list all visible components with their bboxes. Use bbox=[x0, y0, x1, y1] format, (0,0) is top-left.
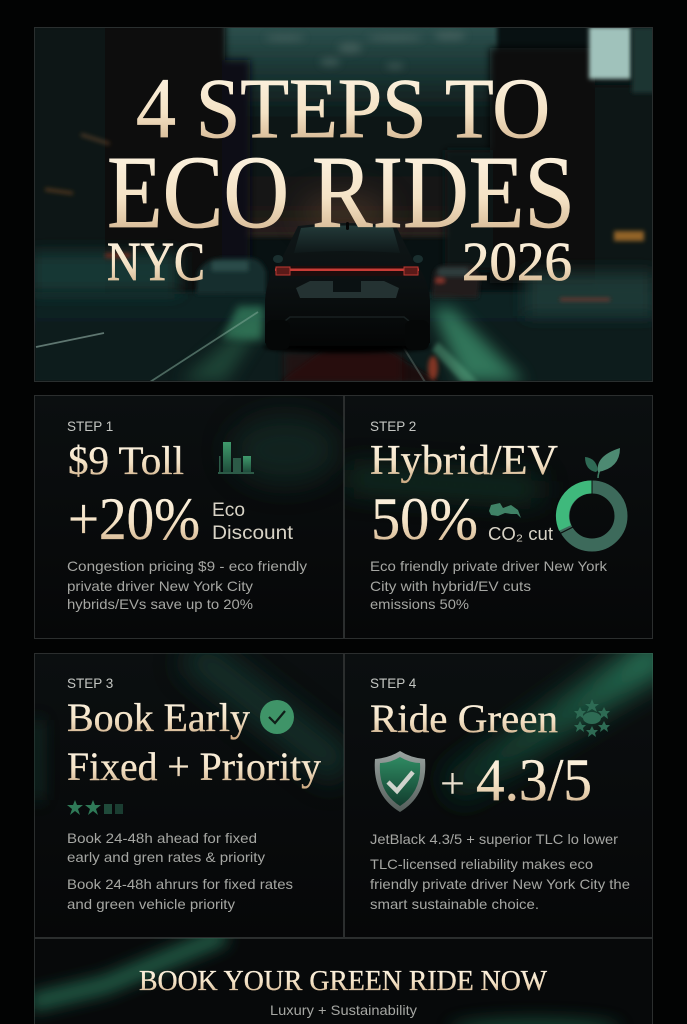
step 4 label: STEP 4 bbox=[370, 676, 417, 691]
step 2 description: Eco friendly private driver New York bbox=[370, 558, 608, 574]
step 4 description: JetBlack 4.3/5 + superior TLC lo lower bbox=[370, 831, 618, 847]
icon: shield bbox=[375, 751, 425, 812]
stat label: Eco Discount: Discount bbox=[212, 523, 294, 544]
step 3 label: STEP 3 bbox=[67, 676, 113, 691]
step 1 description: hybrids/EVs save up to 20% bbox=[67, 596, 253, 612]
step 3 description: Book 24-48h ahead for fixed bbox=[67, 830, 257, 846]
panel: step 1 bbox=[34, 396, 344, 638]
icon: rating stars bbox=[67, 800, 123, 815]
hero title: NYC bbox=[107, 231, 205, 292]
panel: step 3 bbox=[34, 650, 344, 938]
stat label: Eco Discount: Eco bbox=[212, 500, 245, 521]
step 4 description: friendly private driver New York City the bbox=[370, 876, 630, 892]
icon: small car bbox=[489, 503, 521, 518]
icon: check badge bbox=[260, 700, 294, 734]
heading: Fixed + Priority: Fixed + Priority bbox=[67, 744, 321, 789]
stat: +20%: +20% bbox=[68, 486, 200, 552]
panel: call to action bbox=[30, 935, 652, 1024]
step 1 description: Congestion pricing $9 - eco friendly bbox=[67, 558, 307, 574]
step 1 description: private driver New York City bbox=[67, 578, 253, 594]
step 2 description: City with hybrid/EV cuts bbox=[370, 578, 531, 594]
heading: $9 Toll: $9 Toll bbox=[68, 438, 184, 483]
step 2 label: STEP 2 bbox=[370, 419, 416, 434]
icon: bar chart bbox=[218, 442, 254, 474]
hero title: 2026 bbox=[462, 231, 572, 292]
stat: 4.3/5 rating: + bbox=[440, 759, 465, 808]
hero background: city street at dusk bbox=[20, 20, 665, 382]
stat: 50%: 50% bbox=[371, 486, 478, 552]
panel: step 2 bbox=[344, 396, 652, 638]
stat label: CO2 cut: CO₂ cut bbox=[488, 524, 553, 544]
stat label: Eco Discount bbox=[212, 500, 294, 544]
road glow and lane markings bbox=[36, 306, 525, 382]
hero title bbox=[107, 60, 575, 292]
CTA tagline: Luxury + Sustainability bbox=[270, 1002, 417, 1018]
step 2 description: emissions 50% bbox=[370, 596, 469, 612]
panel: step 4 bbox=[344, 650, 665, 938]
step 4 description: smart sustainable choice. bbox=[370, 896, 539, 912]
main car rear view bbox=[263, 222, 431, 353]
hero title: 4 STEPS TO bbox=[136, 60, 550, 156]
hero panel bbox=[20, 20, 665, 382]
chart: CO2 donut bbox=[559, 480, 621, 545]
heading: Hybrid/EV: Hybrid/EV bbox=[370, 438, 558, 484]
step 3 description: early and gren rates & priority bbox=[67, 849, 265, 865]
step 3 description: Book 24-48h ahrurs for fixed rates bbox=[67, 876, 293, 892]
step 4 description bbox=[370, 831, 630, 912]
step 3 description: and green vehicle priority bbox=[67, 896, 235, 912]
heading: Ride Green: Ride Green bbox=[370, 696, 558, 741]
CTA heading: BOOK YOUR GREEN RIDE NOW bbox=[139, 965, 548, 997]
stat: 4.3/5 rating: 4.3/5 bbox=[476, 747, 592, 813]
step 1 description bbox=[67, 558, 307, 612]
hero title: ECO RIDES bbox=[107, 135, 575, 250]
icon: star cluster bbox=[574, 699, 610, 737]
step 1 label: STEP 1 bbox=[67, 419, 113, 434]
icon: leaf bbox=[585, 448, 620, 478]
step 2 description bbox=[370, 558, 608, 612]
heading: Book Early: Book Early bbox=[67, 695, 250, 740]
step 3 description bbox=[67, 830, 293, 912]
blurred traffic cars bbox=[196, 258, 480, 298]
step 4 description: TLC-licensed reliability makes eco bbox=[370, 856, 593, 872]
